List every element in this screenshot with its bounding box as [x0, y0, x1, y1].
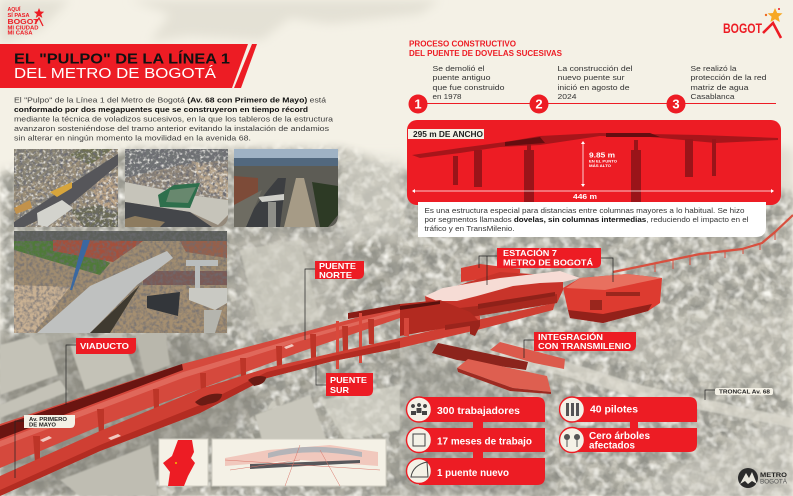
viaduct: puente sur deck	[0, 303, 555, 496]
logo: Aquí sí pasa Bogotá	[8, 5, 44, 36]
logo: Bogotá: BOGOT	[723, 21, 763, 36]
step 1: puente antiguo	[432, 73, 490, 82]
step 3: 3	[672, 96, 680, 112]
logo: Bogotá	[723, 8, 782, 38]
label: Av. Primero de Mayo: DE MAYO	[29, 422, 56, 428]
step 2: inició en agosto de	[558, 83, 630, 92]
stat: cero árboles afectados: Cero árboles	[589, 431, 650, 442]
stat: 17 meses de trabajo	[406, 428, 545, 452]
title banner	[0, 44, 257, 88]
panel: bridge elevation	[407, 120, 781, 205]
step 2: nuevo puente sur	[558, 73, 625, 82]
step 1: en 1978	[432, 92, 462, 101]
logo: Aquí sí pasa Bogotá: AQUÍ	[8, 5, 21, 13]
station east building	[563, 274, 662, 323]
stat: cero árboles afectados	[560, 428, 697, 452]
label: Av. Primero de Mayo	[15, 415, 75, 478]
logo: Aquí sí pasa Bogotá: MI CASA	[8, 30, 33, 36]
title banner: EL "PULPO" DE LA LÍNEA 1	[14, 50, 230, 68]
width tag: 295 m DE ANCHO	[413, 130, 483, 139]
label: troncal Av. 68: TRONCAL Av. 68	[719, 390, 770, 396]
logo: Metro Bogotá: METRO	[760, 472, 787, 479]
height dimension: EN EL PUNTO	[589, 160, 618, 164]
station 7 building	[400, 271, 580, 336]
stat: cero árboles afectados: afectados	[589, 440, 635, 452]
logo: Aquí sí pasa Bogotá: BOGOT	[8, 17, 39, 26]
text block: structure explanation: Es una estructura especial para distancias entre columnas mayores a lo habitual. Se hizo	[424, 206, 744, 215]
intro text block: avanzaron sosteniéndose del tramo anterior evitando la instalación de andamios	[14, 124, 329, 133]
step 1	[408, 64, 504, 114]
intro text block: conformado por dos megapuentes que se construyeron en tiempo récord	[14, 105, 308, 114]
back building of station	[461, 264, 520, 282]
step 1: Se demolió el	[432, 64, 485, 73]
step 3: Casablanca	[690, 92, 735, 101]
label: puente norte: NORTE	[319, 270, 352, 280]
stat: 17 meses de trabajo: 17 meses de trabajo	[437, 436, 532, 448]
stat connectors	[473, 420, 638, 460]
step 1: que fue construido	[432, 83, 504, 92]
stat: 1 puente nuevo	[406, 458, 545, 485]
label: puente norte	[305, 261, 364, 340]
span dimension: 446 m	[573, 192, 597, 201]
label: puente sur	[316, 365, 373, 396]
elevated line to the northeast	[613, 215, 793, 272]
intro text block: El "Pulpo" de la Línea 1 del Metro de Bogotá (Av. 68 con Primero de Mayo) está	[14, 96, 327, 104]
height dimension	[581, 141, 618, 187]
stat: 40 pilotes: 40 pilotes	[590, 404, 638, 416]
step 2: 2024	[558, 92, 576, 101]
logo: Aquí sí pasa Bogotá: MI CIUDAD	[8, 26, 39, 32]
intro text block: mediante la técnica de voladizos sucesivos, en la que los tableros de la estructura	[14, 114, 334, 124]
text block: structure explanation: por segmentos llamados dovelas, sin columnas intermedias , reduciendo el impacto en el	[424, 215, 749, 224]
process heading	[409, 40, 562, 58]
logo: Metro Bogotá: BOGOTÁ	[760, 478, 787, 486]
photo 1: bridge construction aerial	[14, 149, 118, 227]
step 2	[530, 64, 633, 114]
text block: structure explanation	[418, 202, 766, 237]
intro text block	[14, 96, 334, 142]
bridge silhouette	[412, 133, 778, 202]
step 3: Se realizó la	[690, 64, 738, 73]
step 1: 1	[414, 96, 422, 112]
logo: Aquí sí pasa Bogotá: SÍ PASA	[8, 11, 30, 19]
photo 3: street view with viaduct	[234, 149, 338, 227]
photo 4: deck and crane aerial	[14, 231, 227, 333]
label: viaducto	[66, 338, 136, 405]
timeline line	[418, 102, 776, 104]
transmilenio integration platforms	[432, 342, 565, 394]
label: troncal Av. 68	[705, 388, 773, 400]
stat: 300 trabajadores: 300 trabajadores	[437, 406, 520, 417]
stat: 1 puente nuevo: 1 puente nuevo	[437, 468, 509, 479]
step 3	[666, 64, 766, 114]
plan inset	[212, 439, 386, 486]
label: estación 7: ESTACIÓN 7	[503, 247, 557, 258]
label: integración con transmilenio: INTEGRACIÓN	[538, 331, 603, 342]
stat: 300 trabajadores	[406, 397, 545, 422]
label: puente norte: PUENTE	[319, 261, 356, 271]
text block: structure explanation: tráfico y en TransMilenio.	[424, 224, 514, 233]
label: estación 7: METRO DE BOGOTÁ	[503, 258, 593, 268]
logo: Metro Bogotá	[738, 468, 787, 488]
label: puente sur: PUENTE	[330, 375, 367, 385]
height dimension: 9.85 m	[589, 150, 615, 160]
height dimension: MÁS ALTO	[589, 163, 612, 168]
label: estación 7	[479, 247, 613, 285]
step 3: protección de la red	[690, 73, 766, 82]
step 2: La construcción del	[558, 64, 633, 73]
process heading: DEL PUENTE DE DOVELAS SUCESIVAS	[409, 49, 562, 58]
label: integración con transmilenio	[524, 331, 636, 358]
stat: 40 pilotes	[560, 397, 697, 422]
process heading: PROCESO CONSTRUCTIVO	[409, 40, 516, 48]
location map inset	[159, 439, 208, 486]
label: puente sur: SUR	[330, 385, 349, 395]
intro text block: sin alterar en ningún momento la movilidad en la avenida 68.	[14, 134, 251, 142]
step 3: matriz de agua	[690, 83, 750, 92]
photo 2: green form traveller on deck	[125, 149, 228, 227]
span dimension	[412, 189, 774, 201]
viaduct: puente norte deck	[0, 300, 480, 468]
step 2: 2	[535, 96, 543, 112]
title banner: DEL METRO DE BOGOTÁ	[14, 65, 216, 82]
label: Av. Primero de Mayo: Av. PRIMERO	[29, 417, 67, 423]
label: integración con transmilenio: CON TRANSMILENIO	[538, 341, 631, 351]
label: viaducto: VIADUCTO	[80, 341, 129, 351]
